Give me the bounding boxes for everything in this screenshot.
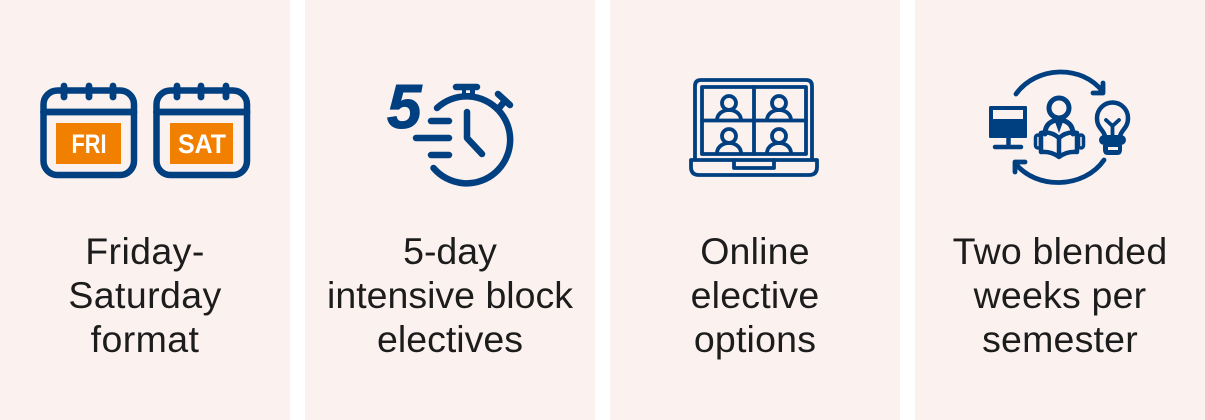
icon: stopwatch with number 5: 5	[387, 73, 423, 142]
text: 5-day intensive block electives: 5-day	[403, 230, 497, 272]
text: Online elective options: options	[694, 318, 816, 360]
text: 5-day intensive block electives: intensive block	[327, 274, 573, 316]
text: Friday-Saturday format: Saturday	[68, 274, 222, 316]
text: Online elective options: Online	[700, 230, 810, 272]
icon: FRI and SAT calendars: FRI	[72, 129, 106, 159]
text: Online elective options	[691, 230, 819, 360]
icon: FRI and SAT calendars: SAT	[178, 129, 226, 159]
icon: monitor, reader and light bulb in a cycle	[989, 70, 1130, 185]
text: 5-day intensive block electives	[327, 230, 573, 360]
panel: Two blended weeks per semester	[915, 0, 1205, 420]
panel: Online elective options	[610, 0, 900, 420]
text: 5-day intensive block electives: electives	[377, 318, 523, 360]
text: Friday-Saturday format: format	[91, 318, 199, 360]
text: Online elective options: elective	[691, 274, 819, 316]
icon: laptop with four video call participants	[689, 78, 819, 177]
panel: 5-day intensive block electives	[305, 0, 595, 420]
icon: FRI and SAT calendars	[40, 82, 250, 178]
text: Two blended weeks per semester	[953, 230, 1167, 360]
text: Two blended weeks per semester: Two blended	[953, 230, 1167, 272]
icon: stopwatch with number 5	[387, 73, 514, 187]
text: Friday-Saturday format: Friday-	[85, 230, 205, 272]
text: Two blended weeks per semester: weeks per	[974, 274, 1146, 316]
text: Two blended weeks per semester: semester	[982, 318, 1138, 360]
panel: Friday-Saturday format	[0, 0, 290, 420]
text: Friday-Saturday format	[68, 230, 222, 360]
